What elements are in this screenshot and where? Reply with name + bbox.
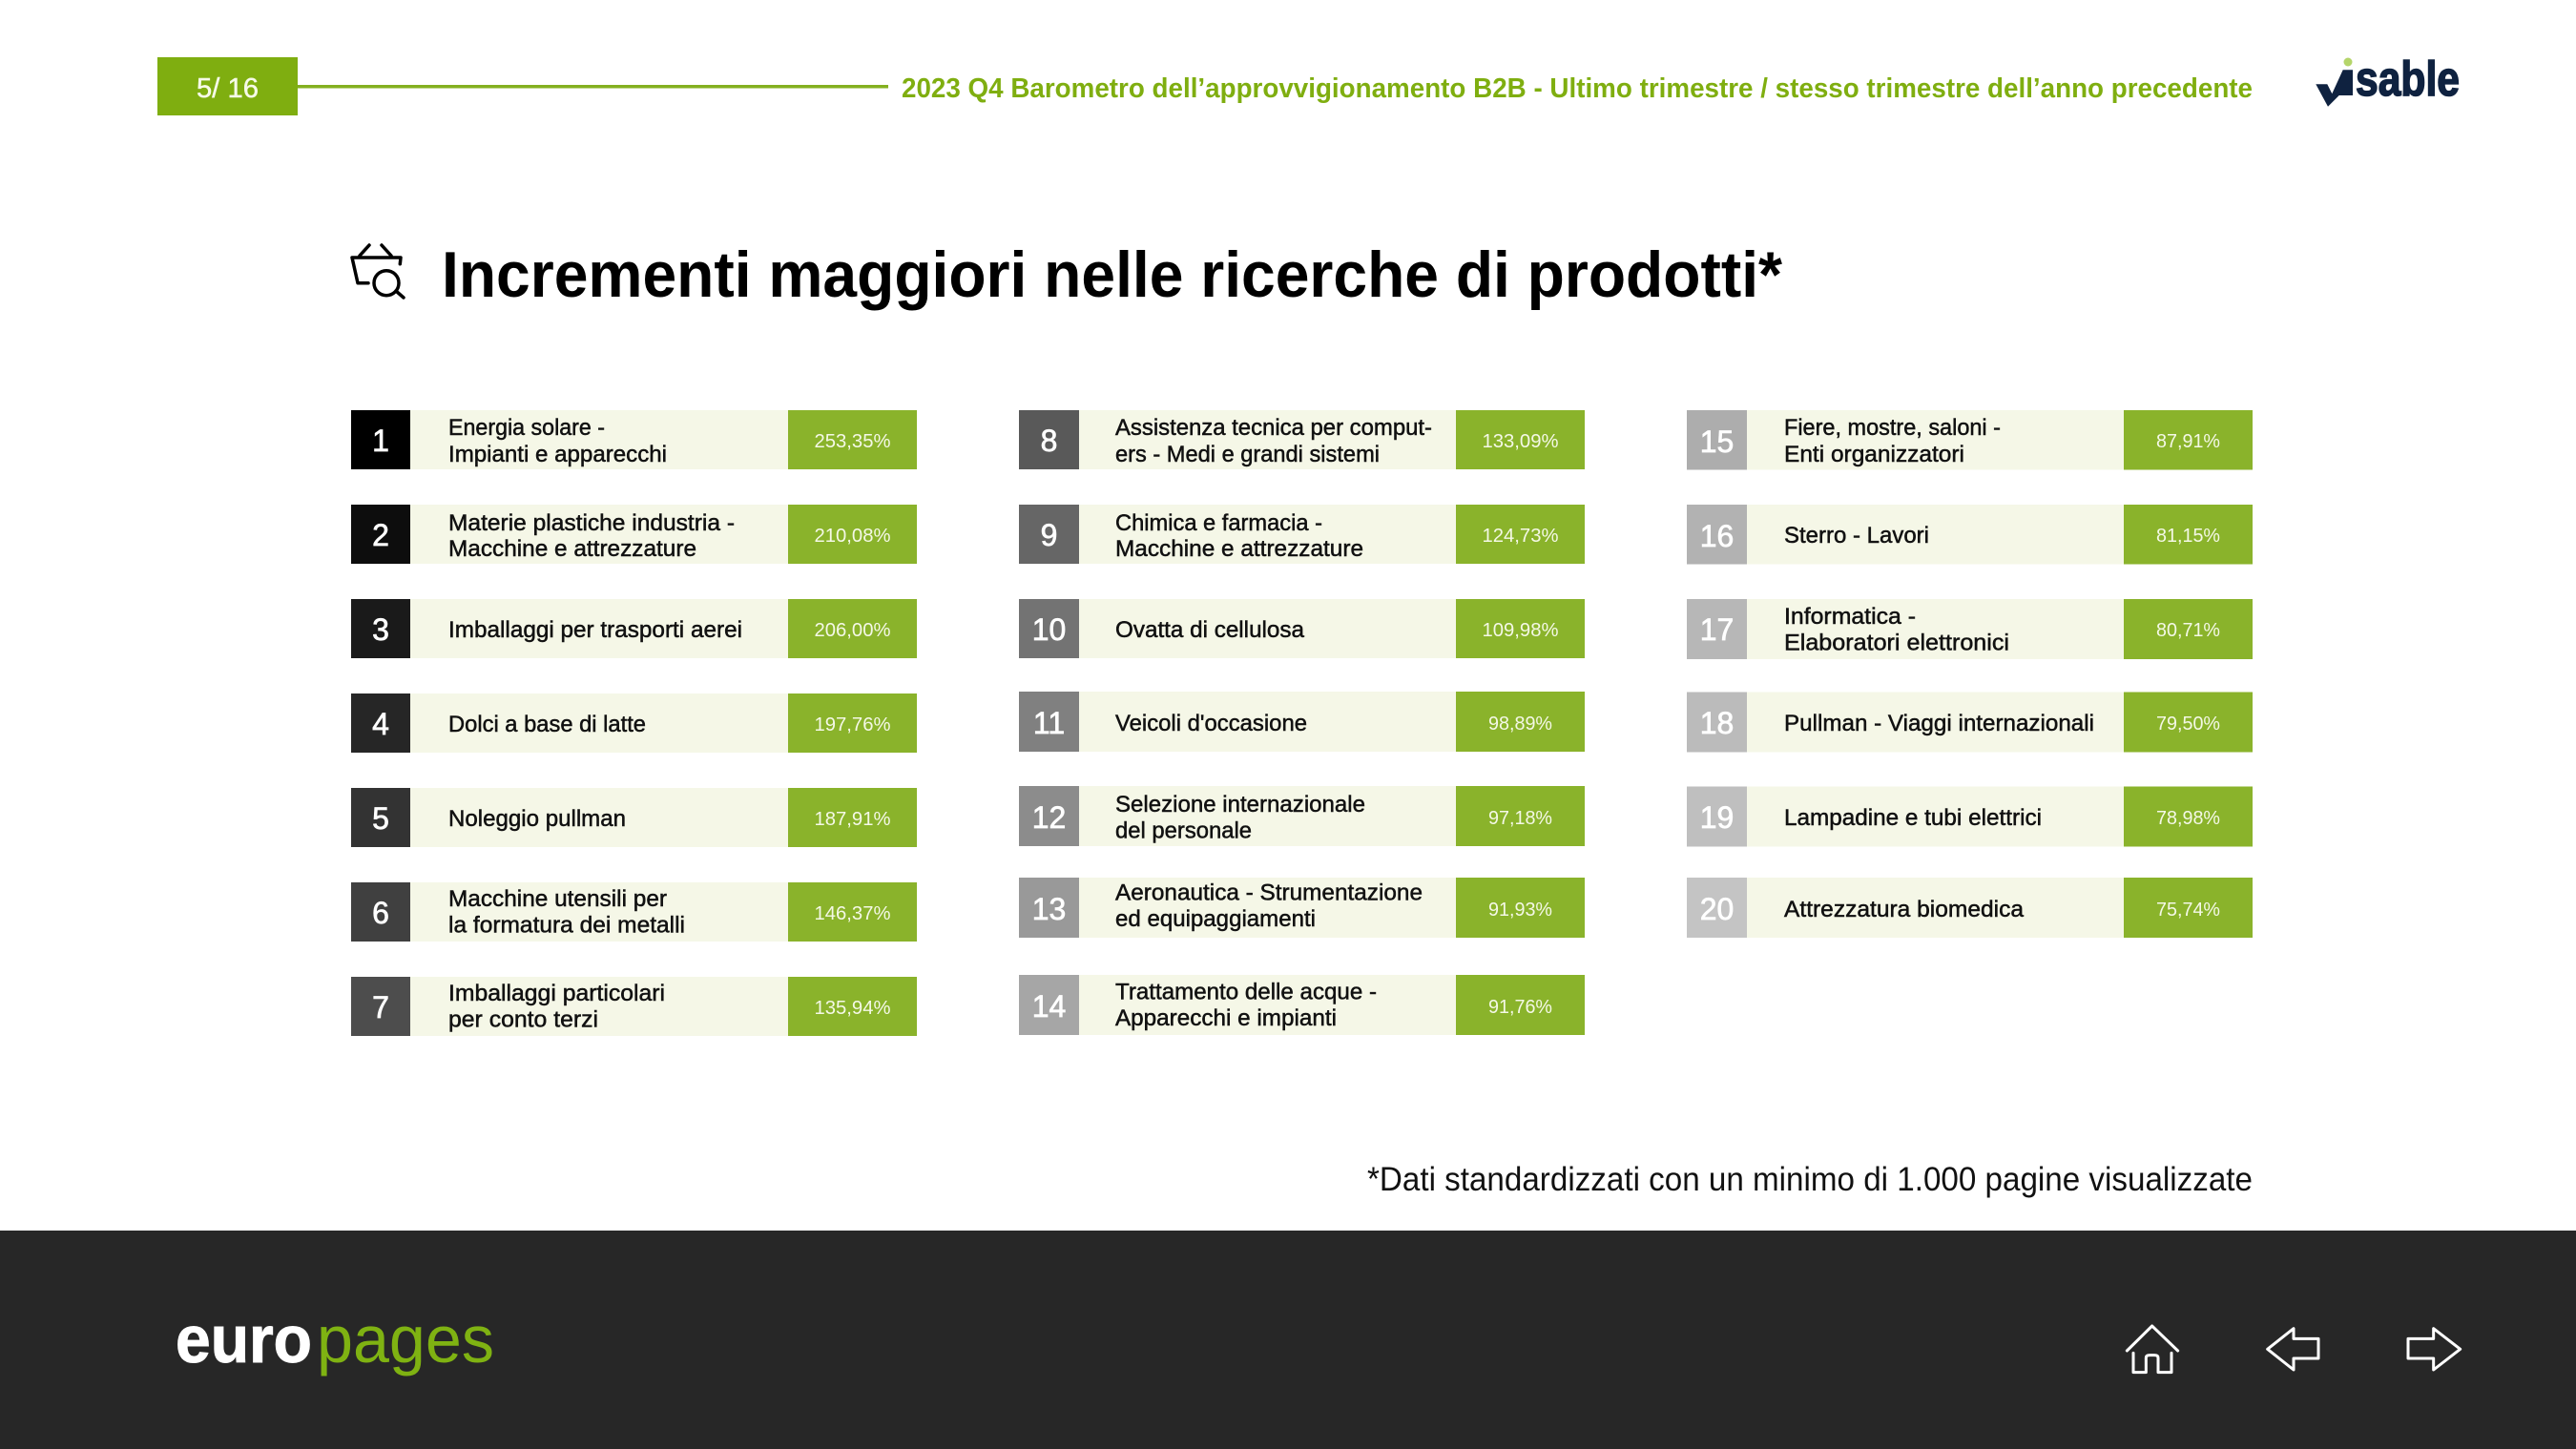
row 4 [351, 693, 917, 753]
row 9: 124,73% [1483, 525, 1559, 547]
row 15: 87,91% [2156, 430, 2220, 452]
row 2: 2 [372, 518, 389, 552]
row 9: Chimica e farmacia - [1115, 510, 1322, 536]
row 10: 109,98% [1483, 619, 1559, 641]
column 3 [1687, 410, 2253, 938]
row 8: 133,09% [1483, 430, 1559, 452]
row 6: la formatura dei metalli [448, 912, 685, 939]
row 12: 97,18% [1488, 807, 1552, 829]
logo: visable: sable [2356, 52, 2460, 106]
row 3: 206,00% [815, 619, 891, 641]
row 6: Macchine utensili per [448, 886, 667, 912]
header bar [157, 57, 2253, 115]
row 2: 210,08% [815, 525, 891, 547]
row 18: 79,50% [2156, 713, 2220, 735]
row 11 [1019, 692, 1585, 752]
row 5: 5 [372, 801, 389, 836]
row 17 [1687, 599, 2253, 659]
row 16 [1687, 505, 2253, 565]
row 17: 80,71% [2156, 619, 2220, 641]
row 8: Assistenza tecnica per comput- [1115, 415, 1432, 441]
row 8: 8 [1041, 424, 1057, 458]
row 11: 11 [1033, 706, 1065, 740]
row 4: 4 [372, 707, 389, 741]
row 19: Lampadine e tubi elettrici [1784, 805, 2042, 831]
row 20 [1687, 878, 2253, 938]
row 7: 7 [372, 990, 389, 1025]
row 12: Selezione internazionale [1115, 792, 1365, 818]
row 10 [1019, 599, 1585, 658]
row 16: 16 [1700, 519, 1734, 553]
row 9 [1019, 505, 1585, 564]
row 20: 20 [1700, 892, 1734, 926]
row 15: Enti organizzatori [1784, 442, 1964, 467]
row 6: 6 [372, 896, 389, 930]
logo: europages [176, 1302, 494, 1377]
row 18: 18 [1700, 706, 1734, 740]
row 6 [351, 882, 917, 942]
row 7: 135,94% [815, 997, 891, 1019]
row 2: Materie plastiche industria - [448, 510, 735, 536]
row 7: Imballaggi particolari [448, 981, 665, 1006]
row 19 [1687, 786, 2253, 847]
row 15 [1687, 410, 2253, 469]
row 13: 13 [1032, 892, 1066, 926]
row 14: Trattamento delle acque - [1115, 979, 1377, 1005]
row 18 [1687, 693, 2253, 752]
row 13: 91,93% [1488, 899, 1552, 921]
row 8 [1019, 410, 1585, 469]
row 4: Dolci a base di latte [448, 712, 646, 737]
title: Incrementi maggiori nelle ricerche di prodotti* [442, 238, 1783, 311]
row 2: Macchine e attrezzature [448, 536, 696, 562]
row 8: ers - Medi e grandi sistemi [1115, 442, 1380, 467]
row 12 [1019, 786, 1585, 846]
row 7: per conto terzi [448, 1007, 598, 1032]
row 11: 98,89% [1488, 713, 1552, 735]
row 1: Energia solare - [448, 415, 605, 441]
row 12: del personale [1115, 818, 1252, 843]
page number badge: 5/ 16 [197, 73, 259, 104]
row 5 [351, 788, 917, 847]
logo: europages: pages [317, 1302, 494, 1377]
row 12: 12 [1032, 800, 1066, 835]
row 20: 75,74% [2156, 899, 2220, 921]
row 14 [1019, 975, 1585, 1035]
row 5: Noleggio pullman [448, 806, 626, 832]
row 3: 3 [372, 612, 389, 647]
row 9: Macchine e attrezzature [1115, 536, 1363, 562]
logo: visable [2316, 52, 2460, 107]
row 13: Aeronautica - Strumentazione [1115, 880, 1423, 906]
footnote: *Dati standardizzati con un minimo di 1.000 pagine visualizzate [1367, 1161, 2253, 1198]
row 17: Informatica - [1784, 604, 1916, 630]
row 3: Imballaggi per trasporti aerei [448, 617, 742, 643]
row 11: Veicoli d'occasione [1115, 711, 1307, 736]
row 1: 1 [372, 424, 389, 458]
row 10: 10 [1032, 612, 1066, 647]
row 1: 253,35% [815, 430, 891, 452]
row 14: 91,76% [1488, 996, 1552, 1018]
header title: 2023 Q4 Barometro dell’approvvigionamento B2B - Ultimo trimestre / stesso trimestre dell’anno precedente [902, 73, 2253, 104]
row 19: 78,98% [2156, 807, 2220, 829]
row 18: Pullman - Viaggi internazionali [1784, 711, 2094, 736]
row 9: 9 [1041, 518, 1057, 552]
row 7 [351, 977, 917, 1036]
icon: next arrow [2408, 1329, 2461, 1370]
row 20: Attrezzatura biomedica [1784, 897, 2025, 922]
row 14: 14 [1032, 989, 1066, 1024]
row 15: 15 [1700, 424, 1734, 459]
row 16: 81,15% [2156, 525, 2220, 547]
row 19: 19 [1700, 800, 1734, 835]
page number badge [157, 57, 298, 115]
row 16: Sterro - Lavori [1784, 523, 1929, 549]
row 1: Impianti e apparecchi [448, 442, 667, 467]
icon: previous arrow [2268, 1329, 2318, 1370]
row 15: Fiere, mostre, saloni - [1784, 415, 2001, 441]
column 2 [1019, 410, 1585, 1035]
row 2 [351, 505, 917, 564]
icon: basket with magnifier [352, 245, 404, 298]
icon: home [2127, 1326, 2178, 1373]
logo: europages: euro [176, 1302, 312, 1377]
row 10: Ovatta di cellulosa [1115, 617, 1305, 643]
row 5: 187,91% [815, 808, 891, 830]
header rule [298, 85, 888, 88]
row 14: Apparecchi e impianti [1115, 1005, 1337, 1031]
row 6: 146,37% [815, 902, 891, 924]
footer band [0, 1231, 2576, 1449]
column 1 [351, 410, 917, 1036]
row 1 [351, 410, 917, 469]
row 17: Elaboratori elettronici [1784, 630, 2009, 656]
row 13: ed equipaggiamenti [1115, 906, 1316, 932]
row 3 [351, 599, 917, 658]
row 13 [1019, 878, 1585, 938]
row 17: 17 [1700, 612, 1734, 647]
row 4: 197,76% [815, 714, 891, 735]
